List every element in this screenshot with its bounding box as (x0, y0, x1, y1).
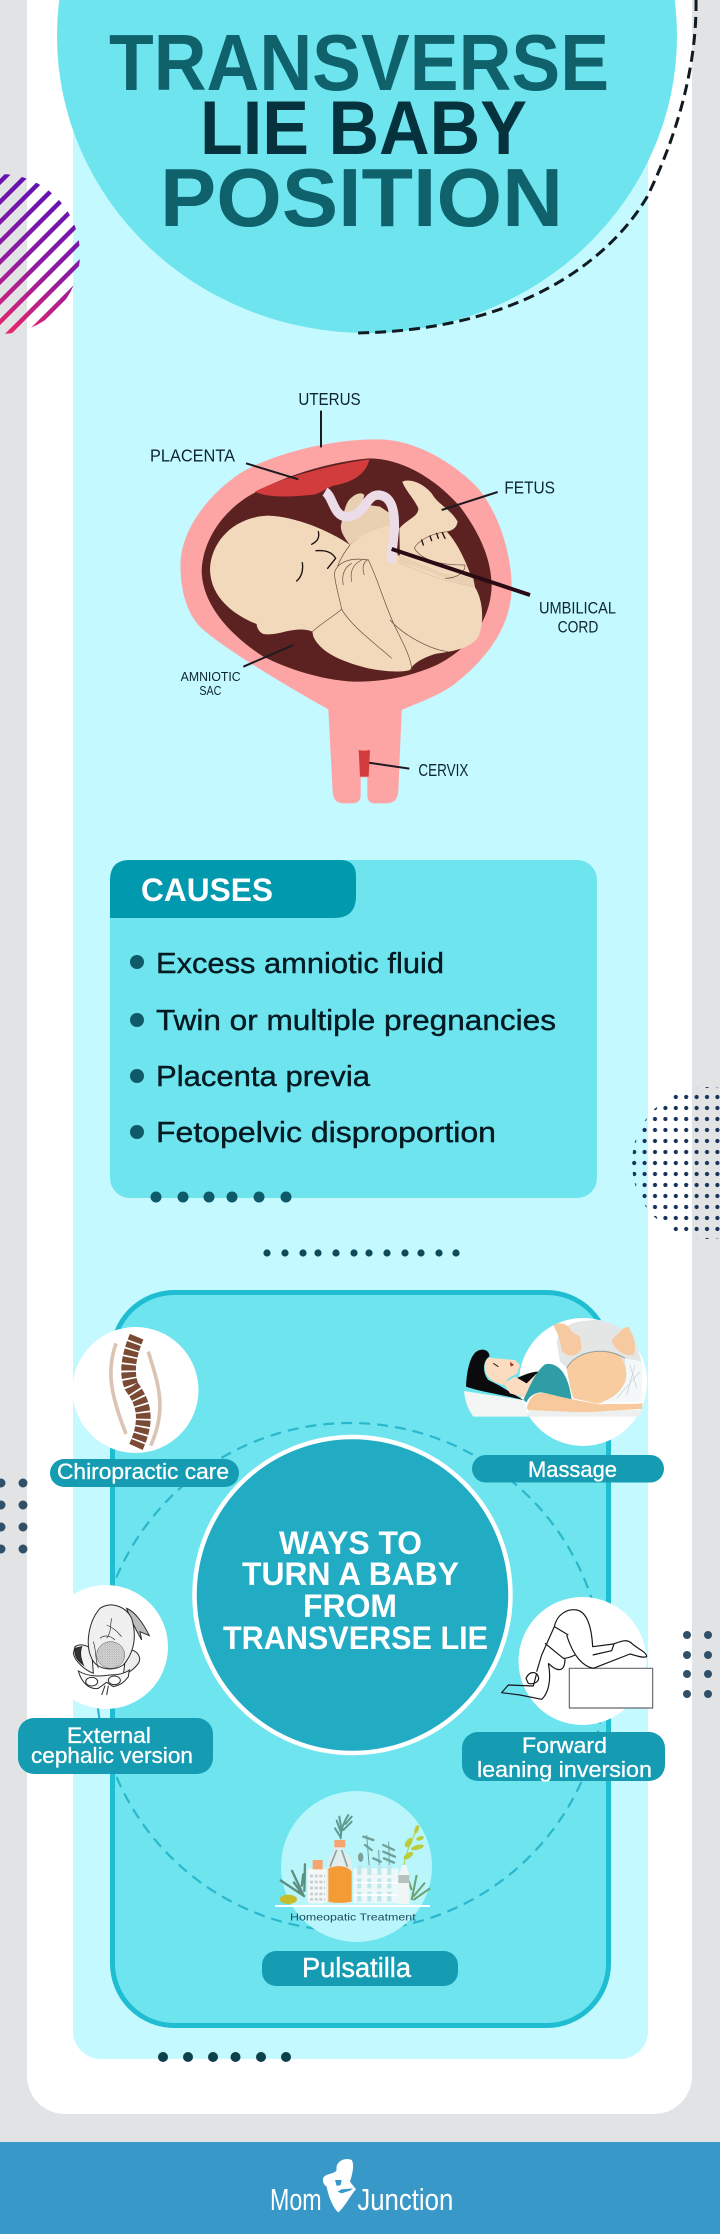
label: amniotic: AMNIOTIC (181, 669, 241, 684)
title line 2: LIE BABY (200, 86, 527, 171)
label lines (243, 411, 498, 769)
label: placenta: PLACENTA (150, 446, 235, 466)
forward label pill (462, 1732, 665, 1781)
pulsatilla label pill (262, 1951, 458, 1986)
shelf line (275, 1905, 430, 1907)
label: cervix: CERVIX (418, 760, 469, 780)
fetus (210, 480, 482, 672)
icon: spine (111, 1337, 160, 1448)
heading line 4: TRANSVERSE LIE (223, 1620, 488, 1656)
cause 2: Twin or multiple pregnancies (156, 1005, 556, 1037)
ecv label pill (18, 1718, 213, 1774)
placenta (255, 459, 369, 496)
logo: MomJunction (270, 2159, 453, 2217)
decorative halftone circle (632, 1087, 720, 1239)
cause 3: Placenta previa (156, 1061, 371, 1093)
causes header tab (110, 860, 356, 918)
panel: causes (110, 860, 597, 1198)
method: pulsatilla (262, 1791, 458, 1986)
logo word Mom: Mom (270, 2183, 322, 2217)
chiropractic label: Chiropractic care (57, 1459, 229, 1484)
title line 3: POSITION (160, 151, 563, 244)
icon: pelvis sketch (73, 1605, 149, 1695)
dashed ring (96, 1423, 604, 1931)
ecv label line 2: cephalic version (31, 1743, 193, 1768)
decorative dots right (683, 1631, 712, 1698)
massage label: Massage (528, 1457, 617, 1482)
heading line 3: FROM (303, 1588, 397, 1624)
central circle disc (194, 1437, 510, 1753)
header circle (57, 0, 677, 333)
uterus anatomy diagram (150, 389, 616, 803)
heading line 2: TURN A BABY (242, 1556, 459, 1592)
dot row divider (263, 1249, 460, 1257)
amniotic sac (202, 458, 492, 682)
fetus face lines and toes (297, 532, 445, 581)
label: sac: SAC (199, 683, 222, 698)
forward label line 1: Forward (522, 1733, 607, 1758)
causes bullets (130, 955, 144, 1139)
chiropractic circle (72, 1327, 198, 1453)
ecv label (31, 1723, 193, 1768)
dot row under causes (150, 1192, 292, 1202)
title line 1: TRANSVERSE (109, 18, 609, 107)
causes list (156, 948, 556, 1149)
causes heading: CAUSES (141, 872, 273, 908)
logo mother and baby mark (323, 2159, 356, 2212)
panel: ways to turn a baby (112, 1292, 608, 2026)
umbilical pointer line (392, 549, 530, 595)
ecv label line 1: External (67, 1723, 151, 1748)
logo mark cutouts (335, 2180, 353, 2193)
fetus thin contour lines (312, 532, 465, 670)
pulsatilla circle (281, 1791, 432, 1942)
central heading (223, 1525, 488, 1656)
forward label line 2: leaning inversion (477, 1757, 652, 1782)
chiropractic label pill (50, 1459, 239, 1487)
method: external cephalic version (18, 1585, 213, 1774)
method: massage (464, 1318, 664, 1482)
decorative dots left (0, 1478, 28, 1554)
icon: homeopathic bottles (275, 1815, 430, 1924)
forward label (477, 1733, 652, 1782)
massage circle (519, 1318, 647, 1446)
cause 1: Excess amniotic fluid (156, 948, 444, 980)
causes background (110, 860, 597, 1198)
dot row bottom (158, 2052, 291, 2062)
logo word Junction: Junction (357, 2183, 453, 2217)
heading line 1: WAYS TO (279, 1525, 422, 1561)
decorative striped circle (0, 174, 80, 334)
forward circle (518, 1597, 646, 1725)
illustration caption: Homeopatic Treatment (290, 1913, 416, 1924)
icon: massage illustration (464, 1320, 643, 1417)
method: forward leaning inversion (462, 1597, 665, 1782)
fetus head and body (210, 516, 482, 672)
ecv circle (44, 1585, 168, 1709)
central circle (194, 1437, 510, 1753)
footer band (0, 2142, 720, 2234)
method: chiropractic care (50, 1327, 239, 1487)
fetus thigh shading (397, 555, 475, 587)
title (109, 18, 609, 244)
label: cord: CORD (558, 618, 598, 637)
umbilical cord (325, 492, 394, 563)
label: umbilical: UMBILICAL (539, 598, 616, 617)
panel: light cyan column (73, 0, 648, 2059)
pulsatilla label: Pulsatilla (302, 1952, 411, 1983)
label: uterus: UTERUS (298, 389, 361, 409)
uterus outer wall (180, 439, 512, 803)
massage label pill (472, 1455, 664, 1482)
cervix canal (359, 750, 370, 777)
diagram labels (150, 389, 616, 780)
dashed arc around header circle (358, 0, 696, 333)
fetus leg and foot (399, 480, 475, 587)
label: fetus: FETUS (504, 477, 555, 497)
cause 4: Fetopelvic disproportion (156, 1117, 496, 1149)
fetus forearm behind cord (341, 493, 390, 545)
icon: inversion pose (502, 1610, 653, 1708)
